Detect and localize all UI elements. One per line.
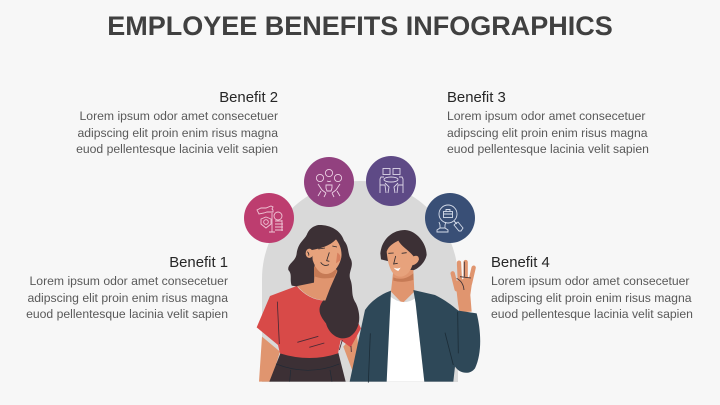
grey arch backdrop [262,181,458,382]
text block: Benefit 3: Benefit 3 [447,90,506,106]
text block: Benefit 4 [491,255,693,321]
text block: Benefit 1: Benefit 1 [169,255,228,271]
text block: Benefit 1: euod pellentesque lacinia velit sapien [26,307,228,321]
text block: Benefit 3: euod pellentesque lacinia velit sapien [447,142,649,156]
woman chin shadow [314,267,337,278]
woman hair [288,225,359,338]
woman neck and chest [297,263,337,301]
text block: Benefit 2: adipscing elit proin enim risus magna [77,126,278,140]
icon: benefit 2 people and perks [304,157,354,207]
text block: Benefit 1 [26,255,228,321]
title: EMPLOYEE BENEFITS INFOGRAPHICS [107,11,613,41]
text block: Benefit 2: Benefit 2 [219,90,278,106]
man chin shadow [393,273,413,282]
man hair back [380,230,427,271]
text block: Benefit 4: Benefit 4 [491,255,550,271]
text block: Benefit 2 [76,90,278,156]
man shirt [387,295,424,382]
text block: Benefit 3: adipscing elit proin enim risus magna [447,126,648,140]
text block: Benefit 4: adipscing elit proin enim risus magna [491,290,692,304]
text block: Benefit 4: euod pellentesque lacinia velit sapien [491,307,693,321]
man raised hand [453,262,474,312]
man neck [391,270,414,303]
icon: benefit 3 meeting table [366,156,416,206]
man face [387,241,413,277]
woman shirt [257,286,361,358]
woman face [312,239,342,274]
text block: Benefit 3: Lorem ipsum odor amet consecetuer [447,109,645,123]
illustration: woman [257,225,361,382]
woman arms [259,332,360,382]
text block: Benefit 2: euod pellentesque lacinia velit sapien [76,142,278,156]
woman skirt [269,353,346,382]
icon: benefit 1 coins and hand [244,193,294,243]
text block: Benefit 4: Lorem ipsum odor amet consecetuer [491,274,689,288]
illustration: man [350,230,480,383]
man jacket [350,290,480,382]
text block: Benefit 1: adipscing elit proin enim risus magna [27,290,228,304]
text block: Benefit 1: Lorem ipsum odor amet consecetuer [30,274,228,288]
text block: Benefit 3 [447,90,649,156]
text block: Benefit 2: Lorem ipsum odor amet consecetuer [80,109,278,123]
icon: benefit 4 job search magnifier [425,193,475,243]
